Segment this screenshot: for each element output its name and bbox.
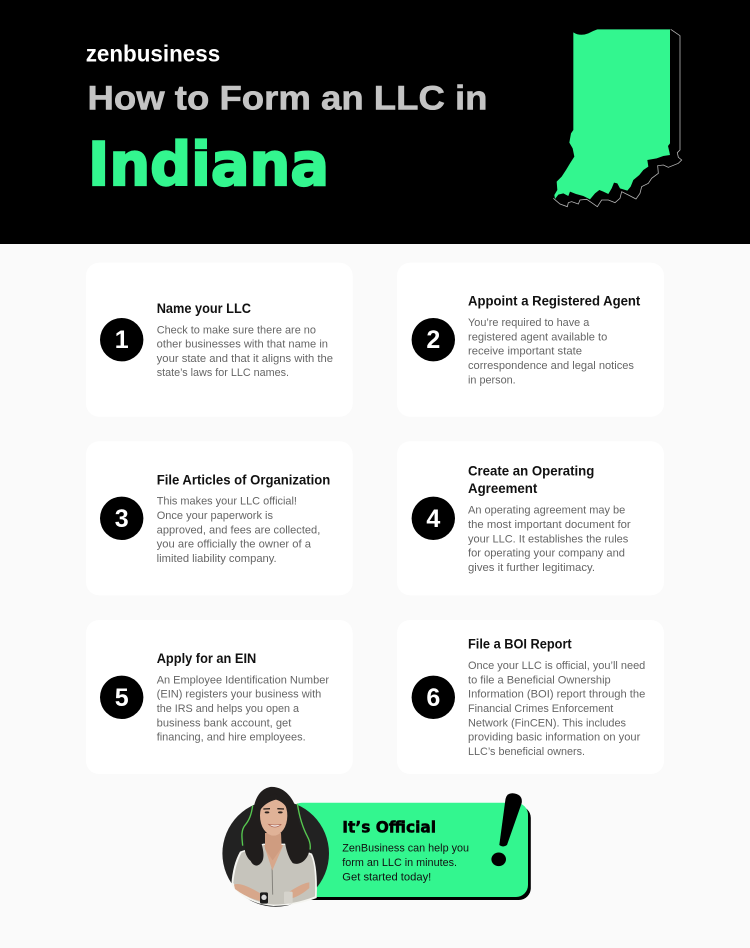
- body text: Network (FinCEN). This includes: [468, 717, 626, 729]
- number badge 4: [412, 497, 455, 540]
- body text: approved, and fees are collected,: [157, 524, 320, 536]
- body text: providing basic information on your: [468, 732, 641, 744]
- title line: How to Form an LLC in: [88, 79, 488, 117]
- body text: [468, 317, 634, 386]
- logo: zenbusiness: zenbusiness: [86, 40, 220, 66]
- body text: Once your paperwork is: [157, 510, 273, 522]
- body text: [157, 674, 329, 744]
- body text: [468, 660, 645, 758]
- number badge 1: 1: [115, 326, 129, 354]
- body text: An Employee Identification Number: [157, 674, 329, 686]
- portrait: woman with crossed arms: [231, 787, 317, 906]
- body text: correspondence and legal notices: [468, 360, 634, 372]
- callout: It's Official: [222, 787, 531, 907]
- panel: step 6: [397, 620, 664, 774]
- body text: [157, 496, 320, 565]
- body text: Information (BOI) report through the: [468, 689, 645, 701]
- number badge 2: 2: [426, 326, 440, 354]
- portrait circle: [222, 800, 329, 907]
- body text: An operating agreement may be: [468, 505, 625, 517]
- body text: [468, 505, 631, 574]
- body text: financing, and hire employees.: [157, 732, 306, 744]
- icon: Indiana state map: [553, 29, 682, 207]
- number badge 1: [100, 318, 143, 361]
- heading: Appoint a Registered Agent: [468, 294, 641, 309]
- header band: [0, 0, 750, 244]
- number badge 6: 6: [426, 684, 440, 712]
- number badge 5: [100, 676, 143, 719]
- body text: state’s laws for LLC names.: [157, 367, 289, 379]
- body text: [157, 324, 333, 379]
- state name: Indiana: [88, 130, 329, 200]
- body text: business bank account, get: [157, 717, 291, 729]
- heading: [468, 464, 594, 496]
- banner: [290, 803, 528, 897]
- body text: Once your LLC is official, you’ll need: [468, 660, 645, 672]
- body text: for operating your company and: [468, 548, 625, 560]
- banner shadow: [293, 806, 531, 900]
- body text: limited liability company.: [157, 553, 277, 565]
- body text: registered agent available to: [468, 331, 607, 343]
- body text: other businesses with that name in: [157, 339, 328, 351]
- panel: step 4: [397, 441, 664, 595]
- body text: form an LLC in minutes.: [342, 857, 457, 869]
- body text: (EIN) registers your business with: [157, 689, 321, 701]
- body text: the IRS and helps you open a: [157, 703, 300, 715]
- heading: File Articles of Organization: [157, 472, 330, 487]
- number badge 2: [412, 318, 455, 361]
- number badge 4: 4: [426, 505, 440, 533]
- number badge 3: 3: [115, 505, 129, 533]
- icon: exclamation mark: [491, 793, 522, 866]
- body text: receive important state: [468, 346, 582, 358]
- panel: step 5: [86, 620, 353, 774]
- body text: you are officially the owner of a: [157, 539, 312, 551]
- panel: step 1: [86, 263, 353, 417]
- body text: Check to make sure there are no: [157, 324, 316, 336]
- body text: ZenBusiness can help you: [342, 843, 469, 855]
- body text: You’re required to have a: [468, 317, 590, 329]
- panel: step 3: [86, 441, 353, 595]
- body text: your LLC. It establishes the rules: [468, 533, 629, 545]
- heading: Agreement: [468, 481, 538, 496]
- body text: Financial Crimes Enforcement: [468, 703, 613, 715]
- body text: Get started today!: [342, 872, 431, 884]
- body text: [342, 843, 469, 884]
- body text: your state and that it aligns with the: [157, 353, 333, 365]
- body text: LLC’s beneficial owners.: [468, 746, 585, 758]
- heading: Create an Operating: [468, 464, 594, 479]
- number badge 5: 5: [115, 684, 129, 712]
- heading: File a BOI Report: [468, 637, 572, 652]
- number badge 3: [100, 497, 143, 540]
- number badge 6: [412, 676, 455, 719]
- heading: Apply for an EIN: [157, 651, 256, 666]
- body text: This makes your LLC official!: [157, 496, 297, 508]
- body text: in person.: [468, 374, 516, 386]
- heading: Name your LLC: [157, 301, 251, 316]
- panel: step 2: [397, 263, 664, 417]
- body text: the most important document for: [468, 519, 631, 531]
- body text: gives it further legitimacy.: [468, 562, 595, 574]
- heading: It’s Official: [342, 818, 436, 837]
- body text: to file a Beneficial Ownership: [468, 674, 611, 686]
